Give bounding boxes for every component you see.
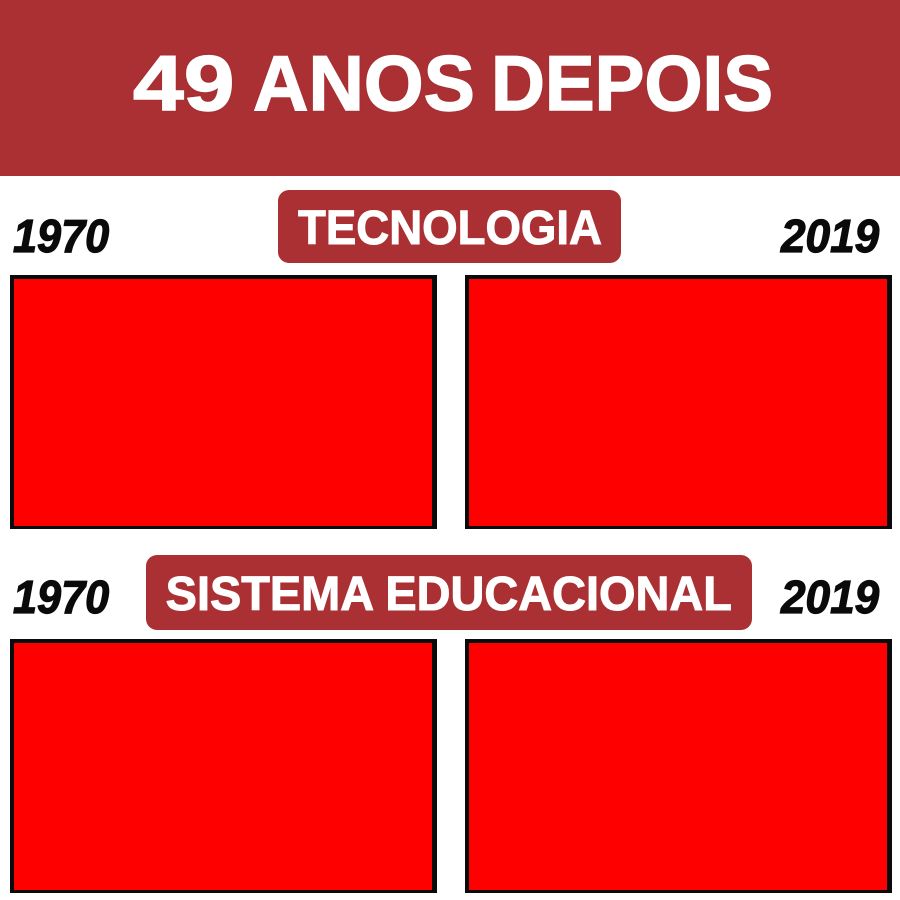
- title: [133, 40, 773, 127]
- header banner: [0, 0, 900, 176]
- title: ANOS: [253, 40, 475, 127]
- year label: 2019 top: 2019: [781, 210, 879, 262]
- year label: 1970 top: 1970: [13, 210, 109, 262]
- heading: sistema educacional: SISTEMA EDUCACIONAL: [166, 568, 732, 621]
- title: 49: [133, 40, 234, 127]
- panel: technology 1970: [10, 275, 437, 529]
- panel: technology 2019: [465, 275, 892, 529]
- year label: 1970 bottom: 1970: [13, 571, 109, 623]
- heading: tecnologia: TECNOLOGIA: [298, 202, 602, 255]
- title: DEPOIS: [491, 40, 773, 127]
- panel: education 2019: [465, 639, 892, 893]
- panel: education 1970: [10, 639, 437, 893]
- heading: sistema educacional: [146, 555, 752, 630]
- year label: 2019 bottom: 2019: [781, 571, 879, 623]
- heading: tecnologia: [278, 190, 621, 263]
